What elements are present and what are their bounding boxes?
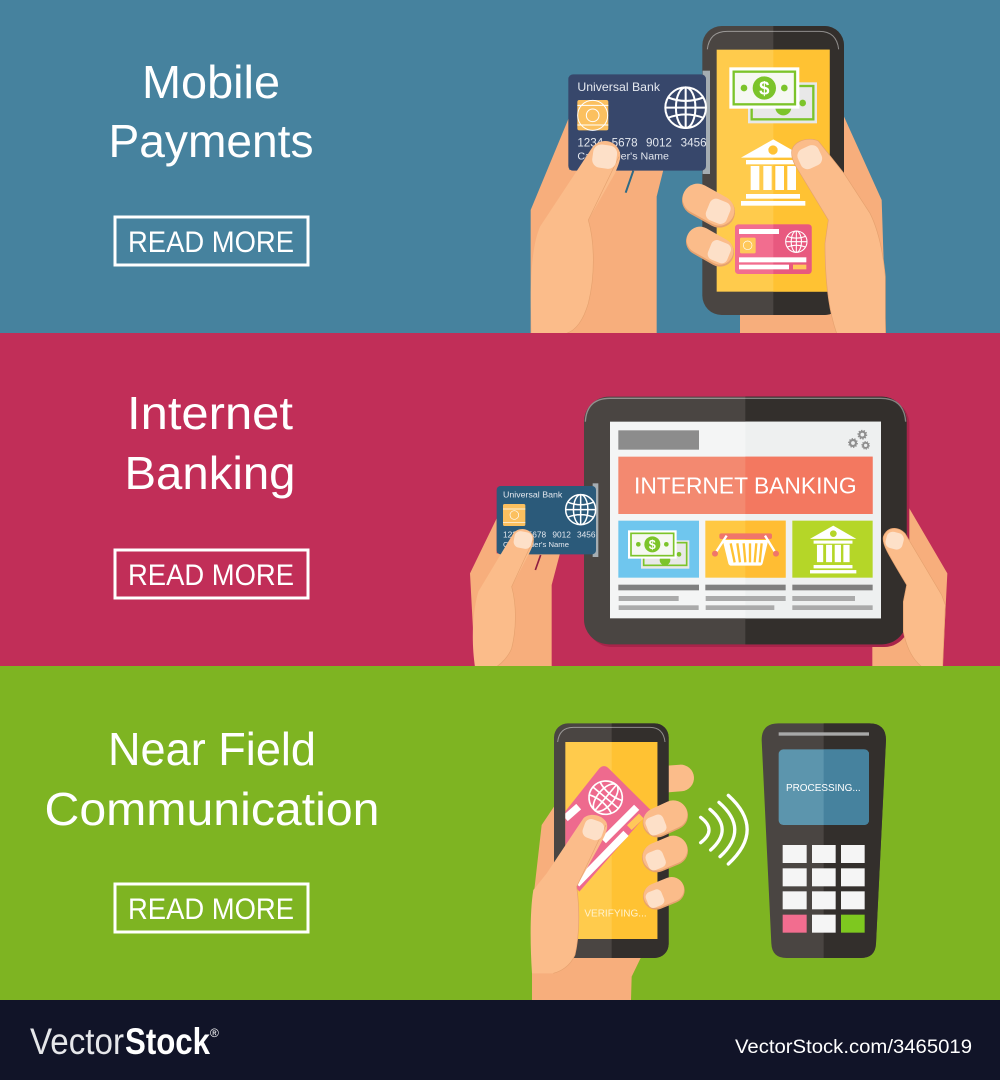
illustration: hands holding card and phone bbox=[531, 26, 886, 333]
credit card: 9012 bbox=[646, 137, 672, 150]
card slot bbox=[703, 71, 710, 174]
tablet screen bbox=[610, 422, 881, 618]
heading: near field communication bbox=[44, 723, 380, 835]
heading: internet banking: Banking bbox=[124, 447, 296, 499]
rear finger bbox=[663, 778, 681, 779]
tile: bank bbox=[792, 521, 873, 578]
illustration: phone and terminal bbox=[531, 723, 886, 1000]
icon: banknotes: $ bbox=[759, 78, 770, 99]
read more button: READ MORE bbox=[128, 893, 294, 926]
watermark logo: Stock bbox=[125, 1021, 210, 1062]
verifying label: VERIFYING... bbox=[584, 909, 647, 920]
credit card: 9012 bbox=[552, 529, 571, 539]
card slot bbox=[593, 483, 598, 557]
left thumb bbox=[531, 141, 620, 333]
credit card: 5678 bbox=[528, 529, 547, 539]
icon: pink card bbox=[735, 224, 812, 274]
right thumbnail bbox=[884, 530, 905, 551]
watermark logo: Vector bbox=[30, 1021, 124, 1062]
right hand back bbox=[740, 117, 886, 333]
read more button bbox=[115, 884, 308, 932]
phone bbox=[554, 723, 669, 958]
credit card: Cardholder's Name bbox=[503, 540, 569, 549]
banner: internet banking: INTERNET BANKING bbox=[634, 473, 857, 499]
tablet bbox=[584, 397, 909, 647]
credit card: Cardholder's Name bbox=[577, 151, 669, 162]
credit card: Universal Bank bbox=[577, 81, 660, 94]
thumb bbox=[531, 815, 607, 973]
heading: internet banking: Internet bbox=[127, 387, 293, 439]
watermark logo bbox=[30, 1021, 219, 1062]
heading: mobile payments bbox=[108, 56, 314, 167]
payment terminal bbox=[762, 723, 886, 958]
fingers bbox=[698, 197, 733, 265]
credit card: Universal Bank bbox=[503, 489, 563, 499]
read more button bbox=[115, 550, 308, 598]
icon: gears bbox=[849, 430, 869, 449]
fingers bbox=[644, 813, 673, 910]
tile: money: $ bbox=[649, 538, 656, 552]
heading: internet banking bbox=[124, 387, 296, 499]
footer bar bbox=[0, 1000, 1000, 1080]
heading: mobile payments: Mobile bbox=[142, 56, 280, 108]
text placeholder lines bbox=[618, 585, 873, 610]
credit card: 5678 bbox=[612, 137, 638, 150]
right hand back bbox=[872, 507, 947, 667]
banner: internet banking bbox=[618, 457, 873, 514]
right thumb bbox=[792, 139, 885, 333]
credit card: 1234 bbox=[503, 529, 522, 539]
heading: mobile payments: Payments bbox=[108, 115, 314, 167]
terminal screen bbox=[779, 749, 869, 825]
keypad bbox=[783, 845, 865, 933]
pink card on screen bbox=[565, 766, 650, 892]
credit card: 3456 bbox=[681, 137, 707, 150]
tile: money bbox=[618, 521, 699, 578]
panel: internet banking bbox=[0, 333, 1000, 667]
phone bbox=[702, 26, 844, 315]
panel: mobile payments bbox=[0, 0, 1000, 333]
credit card: 1234 bbox=[577, 137, 604, 150]
terminal screen: PROCESSING... bbox=[786, 783, 861, 794]
credit card bbox=[497, 486, 596, 554]
tile: basket bbox=[705, 521, 786, 578]
read more button: READ MORE bbox=[128, 559, 294, 592]
icon: banknotes bbox=[729, 67, 817, 123]
left hand back bbox=[531, 117, 663, 333]
credit card: 3456 bbox=[577, 529, 596, 539]
icon: nfc waves bbox=[701, 795, 747, 864]
icon: bank bbox=[741, 139, 805, 206]
left hand back bbox=[470, 518, 560, 667]
panel: near field communication bbox=[0, 666, 1000, 1000]
credit card bbox=[568, 74, 707, 171]
logo placeholder bbox=[618, 430, 699, 450]
heading: near field communication: Near Field bbox=[108, 723, 316, 775]
watermark url: VectorStock.com/3465019 bbox=[735, 1037, 972, 1058]
finger gap bbox=[626, 171, 633, 193]
watermark logo: ® bbox=[210, 1026, 219, 1040]
read more button bbox=[115, 217, 308, 265]
left thumb bbox=[473, 529, 534, 667]
illustration: tablet and card bbox=[470, 397, 947, 667]
right thumb bbox=[883, 528, 945, 667]
finger gap bbox=[535, 555, 541, 570]
heading: near field communication: Communication bbox=[44, 783, 380, 835]
read more button: READ MORE bbox=[128, 226, 294, 259]
hand back bbox=[532, 807, 641, 1000]
